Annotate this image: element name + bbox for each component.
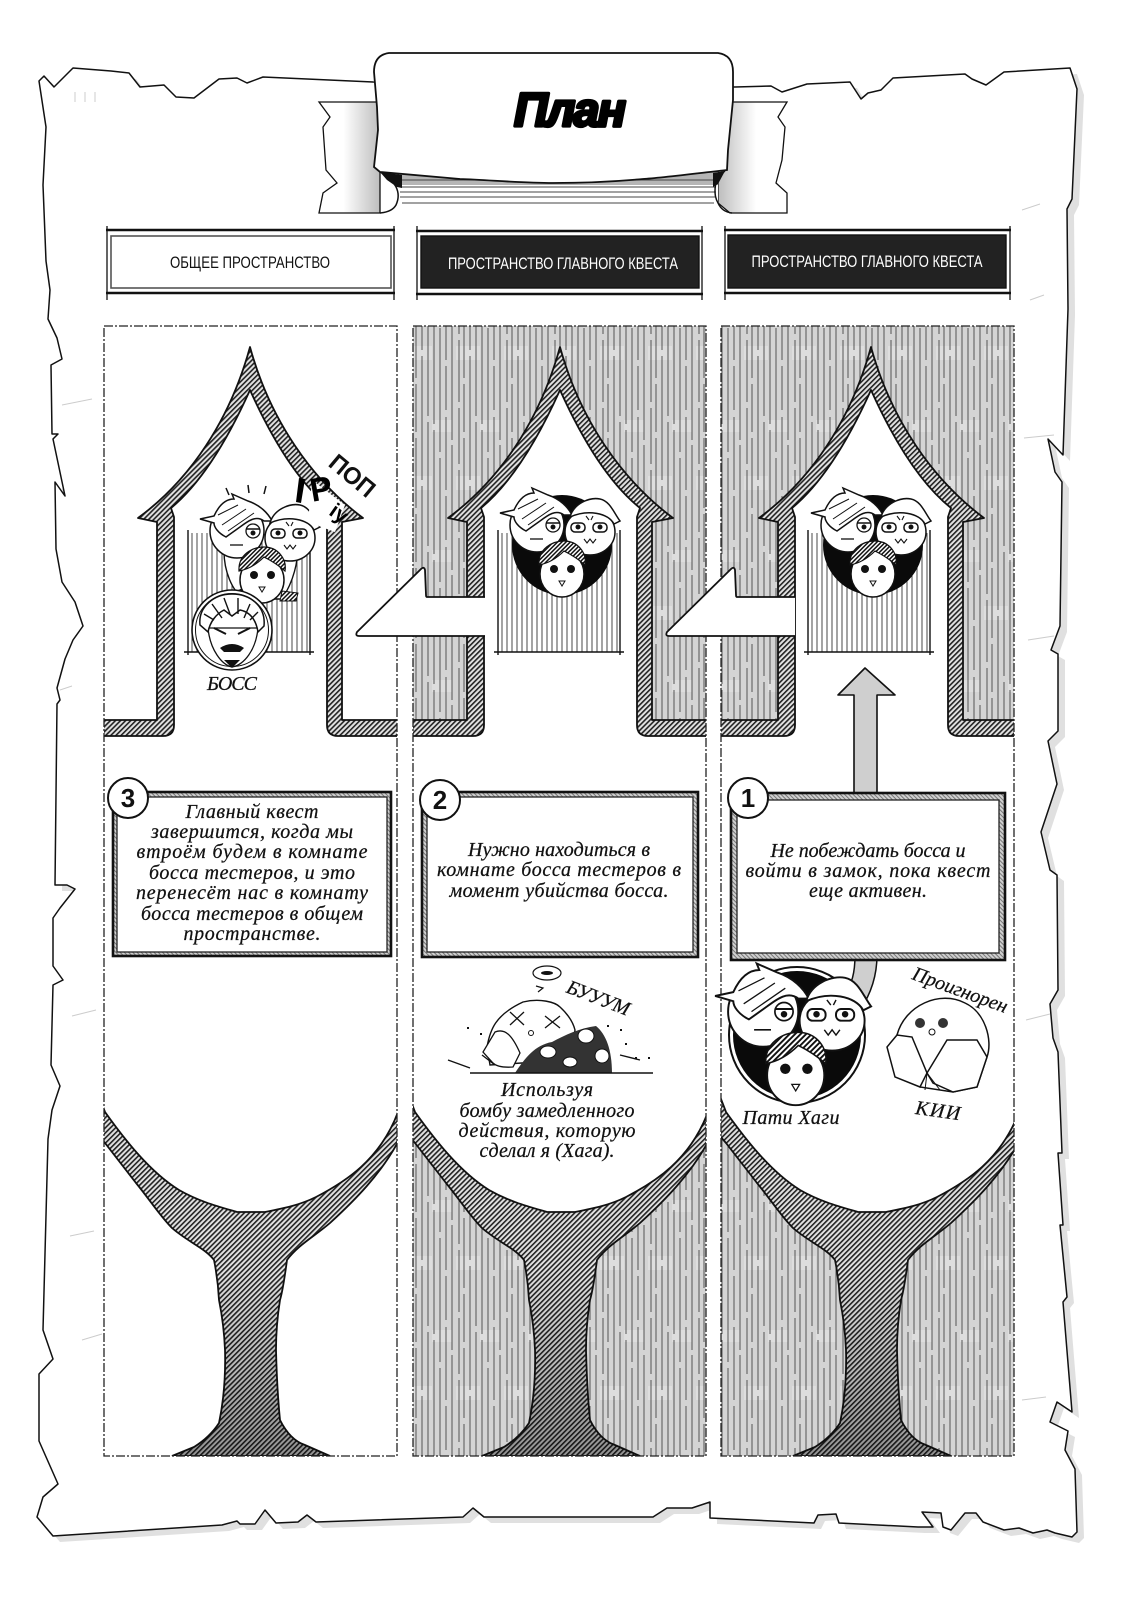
castle walls [721,346,1014,737]
sound effect: pop: iy [325,499,353,528]
arrow: from right panel to middle panel [666,568,795,636]
step 3 badge: 3 [121,783,135,813]
step 3 text: завершится, когда мы [150,821,353,843]
step 3 box [108,778,391,956]
panel: main quest space, right [720,325,1015,1457]
step 2 badge: 2 [433,785,447,815]
step 1 badge: 1 [741,783,755,813]
sound effect: pop: P [307,469,335,509]
party in castle, right panel [811,488,931,597]
boss portrait [192,590,272,670]
window: common space [184,530,314,655]
party in castle, middle panel [500,488,620,597]
bomb text: Используя [500,1079,593,1101]
step 2 badge [420,780,460,820]
castle walls [413,346,706,737]
step 1 badge [728,778,768,818]
panel: main quest space, middle [412,325,707,1457]
label: ignored: Проигнорен [908,963,1011,1018]
step 3 text: втроём будем в комнате [136,841,368,863]
title ribbon [319,53,787,213]
step 3 text [136,801,368,945]
bomb text: действия, которую [458,1120,636,1142]
tab: main quest space, right: ПРОСТРАНСТВО ГЛАВНОГО КВЕСТА [752,252,983,271]
title: План [514,83,626,136]
Kii character [887,998,989,1092]
arrow: up to castle [838,668,895,800]
step 2 text: момент убийства босса. [448,880,668,902]
tree [413,1106,706,1456]
window: middle panel [494,530,624,655]
bomb text: бомбу замедленного [460,1100,634,1122]
panel: common space [103,325,398,1457]
step 2 text: комнате босса тестеров в [437,859,681,881]
sound effect: pop [226,449,380,532]
tab: common space: ОБЩЕЕ ПРОСТРАНСТВО [170,253,330,272]
castle walls [104,346,397,737]
ribbon right tail [718,102,787,213]
step 3 text: босса тестеров, и это [149,862,355,884]
tab: main quest space, middle [416,226,703,300]
ribbon underside [380,170,732,213]
step 3 text: Главный квест [184,801,318,823]
step 3 badge [108,778,148,818]
explosion sketch [448,966,653,1073]
sound effect: pop: ПОП [323,449,380,503]
bomb text: сделал я (Хага). [480,1140,614,1162]
ribbon left tail [319,102,380,213]
step 1 text [746,840,990,902]
step 1 text: войти в замок, пока квест [746,860,990,882]
party in boss room, common space [200,494,320,603]
tree [721,1098,1014,1456]
step 2 text [437,839,681,902]
window: right panel [804,530,934,655]
step 1 text: Не побеждать босса и [770,840,966,862]
ribbon front [374,53,733,183]
step 2 text: Нужно находиться в [467,839,650,861]
tab: main quest space, middle: ПРОСТРАНСТВО ГЛАВНОГО КВЕСТА [448,254,679,273]
step 3 text: босса тестеров в общем [141,903,363,925]
arrow: from middle panel to common space [356,568,485,636]
tree [104,1107,397,1456]
bomb text [458,1079,636,1162]
step 3 text: перенесёт нас в комнату [136,882,368,904]
label: Kii: КИИ [913,1097,963,1125]
step 3 text: пространстве. [184,923,320,945]
tab: main quest space, right [724,226,1011,300]
tab: common space [106,226,395,300]
step 1 box [728,778,1005,960]
sound effect: boom: БУУУМ [562,976,634,1021]
step 2 box [420,780,698,957]
connector from step 1 box to party [845,955,877,1010]
step 1 text: еще активен. [809,880,927,902]
label: boss: БОСС [206,673,258,695]
party portrait [715,964,871,1105]
label: Hagi party: Пати Хаги [742,1107,840,1129]
